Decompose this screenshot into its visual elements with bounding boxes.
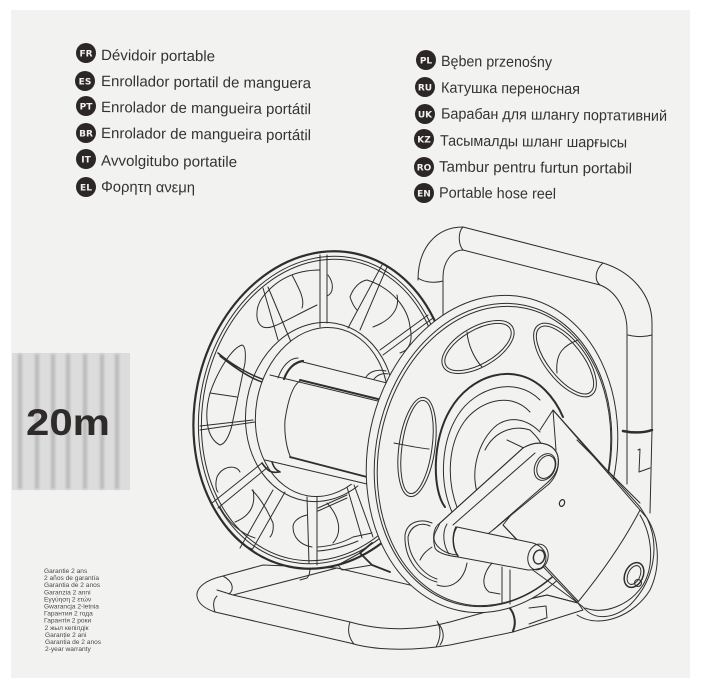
carrying handle frame [418, 227, 652, 513]
right language list: Portable hose reel [439, 185, 556, 203]
warranty text block [44, 568, 102, 653]
warranty text block: Garantia de 2 anos [44, 582, 101, 589]
right language list: EN [417, 190, 431, 200]
lower reel bracket [360, 543, 390, 572]
storage bracket plate [503, 410, 657, 621]
right language list: Bęben przenośny [441, 53, 553, 71]
front hub [436, 374, 563, 512]
warranty text block: Εγγύηση 2 ετών [44, 595, 92, 603]
left language list: IT [81, 156, 92, 166]
left language list: Enrolador de mangueira portátil [101, 99, 311, 118]
frame collar [623, 430, 652, 432]
back reel disc [165, 227, 479, 593]
left language list: Avvolgitubo portatile [101, 153, 237, 171]
left language list: Enrollador portatil de manguera [101, 73, 312, 92]
right language list: RU [418, 84, 432, 94]
right language list: Тасымалды шланг шарғысы [440, 133, 627, 151]
warranty text block: Garanzia 2 anni [44, 589, 91, 596]
back disc spokes [200, 255, 433, 565]
right language list [414, 50, 667, 203]
warranty text block: 2 жыл кепілдік [44, 624, 89, 632]
length label: 20m [26, 402, 110, 443]
right language list: Катушка переносная [441, 80, 580, 98]
left language list: FR [79, 50, 93, 60]
hose reel line drawing [165, 227, 657, 649]
warranty text block: 2-year warranty [45, 646, 92, 653]
front reel disc [337, 272, 647, 636]
right language list: RO [417, 164, 432, 174]
left language list: PT [80, 102, 93, 112]
base frame [197, 565, 583, 649]
left language list [75, 43, 312, 197]
left language list: EL [80, 184, 92, 194]
right language list: Tambur pentru furtun portabil [439, 159, 632, 178]
crank handle [453, 527, 546, 570]
left language list: Dévidoir portable [101, 47, 215, 65]
right language list: UK [418, 110, 433, 120]
back disc windows [207, 270, 411, 551]
warranty text block: 2 años de garantía [44, 575, 99, 582]
right language list: PL [420, 56, 432, 66]
warranty text block: Garantie 2 ans [44, 568, 88, 575]
front disc windows [392, 310, 608, 586]
left language list: ES [79, 78, 91, 88]
warranty text block: Gwarancja 2-letnia [44, 604, 99, 610]
warranty text block: Гарантія 2 роки [44, 617, 91, 625]
left language list: Φορητη ανεμη [101, 179, 195, 196]
left language list: BR [79, 130, 93, 140]
crank arm and handle [434, 443, 560, 572]
support struts under handle [484, 563, 510, 604]
warranty text block: Гарантия 2 года [44, 611, 93, 618]
left language list: Enrolador de mangueira portátil [101, 125, 311, 144]
warranty text block: Garantia de 2 anos [45, 639, 102, 646]
warranty text block: Garanție 2 ani [45, 632, 87, 639]
panel: 20m length band [12, 353, 130, 490]
back hub and drum [231, 311, 409, 513]
right language list: Барабан для шлангу портативний [441, 106, 667, 125]
right language list: KZ [417, 136, 431, 146]
